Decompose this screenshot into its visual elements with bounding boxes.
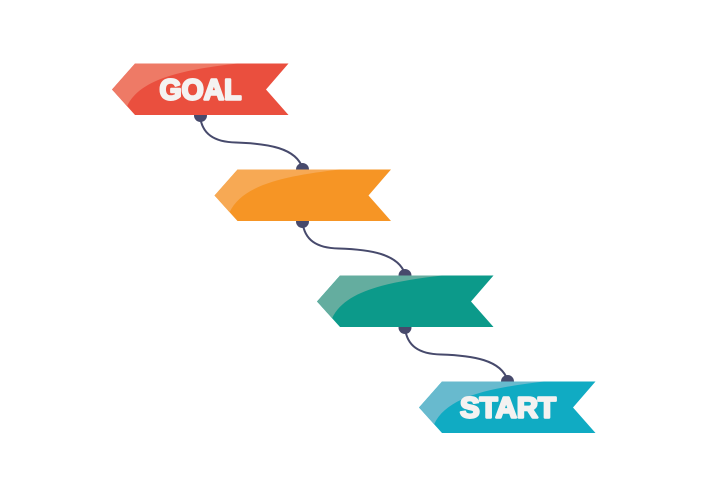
gloss highlight: goal <box>112 64 237 106</box>
label: start: START <box>460 392 556 424</box>
connector: step 2 to start <box>398 321 514 388</box>
connector: goal to step 3 <box>194 109 309 176</box>
arrow banner: goal <box>112 64 288 115</box>
infographic: path from start to goal <box>112 64 596 433</box>
arrow banner: teal step <box>317 276 494 327</box>
arrow banner: start <box>419 382 596 433</box>
gloss highlight: start <box>419 382 544 424</box>
connector: step 3 to step 2 <box>296 215 412 282</box>
gloss highlight: orange step <box>214 170 340 212</box>
label: goal: GOAL <box>160 74 242 106</box>
arrow banner: orange step <box>214 170 391 221</box>
gloss highlight: teal step <box>317 276 442 318</box>
